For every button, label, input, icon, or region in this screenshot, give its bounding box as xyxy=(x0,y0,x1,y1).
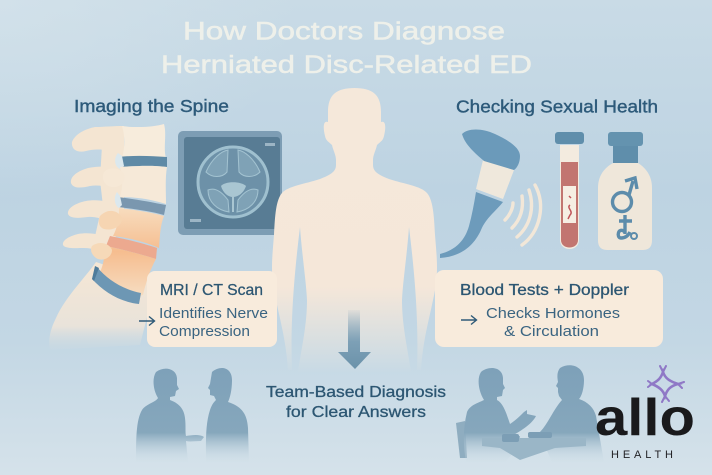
arrow: down xyxy=(338,310,371,369)
arrow xyxy=(461,316,476,324)
icon: body silhouette xyxy=(272,88,437,372)
icon: ultrasound probe xyxy=(440,130,520,258)
arrow xyxy=(139,316,154,326)
icon: purple star xyxy=(648,366,684,402)
vertebra 3 xyxy=(113,208,164,248)
disc 4 xyxy=(92,267,141,304)
icon: doppler waves xyxy=(505,185,541,245)
panel: MRI / CT scan xyxy=(139,271,277,347)
text: team-based diagnosis: Team-Based Diagnosis xyxy=(266,384,446,401)
icon: consultation at table xyxy=(456,365,604,462)
logo: allo health xyxy=(595,366,695,461)
hands xyxy=(502,434,519,442)
vertebra 4 xyxy=(100,246,156,298)
title: How Doctors Diagnose xyxy=(183,18,505,46)
logo: allo health: allo xyxy=(595,389,695,447)
panel: blood tests + doppler: & Circulation xyxy=(504,323,599,340)
text: team-based diagnosis xyxy=(266,384,446,421)
spinous processes xyxy=(63,126,124,256)
text: team-based diagnosis: for Clear Answers xyxy=(286,404,426,421)
disc 2 xyxy=(117,197,166,215)
vertebra 1 xyxy=(122,124,166,158)
icon: blood test tube xyxy=(555,132,584,249)
title xyxy=(161,18,532,79)
vertebra 2 xyxy=(120,166,167,204)
heading: imaging the spine: Imaging the Spine xyxy=(74,96,229,116)
heading: checking sexual health: Checking Sexual Health xyxy=(456,96,658,116)
panel: MRI / CT scan: Identifies Nerve xyxy=(159,305,268,322)
panel: blood tests + doppler xyxy=(435,270,663,347)
logo: allo health: HEALTH xyxy=(611,449,673,461)
joint 1 xyxy=(103,168,124,187)
icon: MRI scan monitor xyxy=(178,131,282,235)
disc 1 xyxy=(118,156,167,167)
icon: two doctors talking xyxy=(136,368,249,462)
icon: hormone bottle xyxy=(598,132,652,250)
icon: spine illustration xyxy=(49,124,167,350)
disc 3 xyxy=(106,236,157,259)
sacrum xyxy=(49,262,150,350)
table xyxy=(482,438,586,460)
title: Herniated Disc-Related ED xyxy=(161,51,532,79)
panel: blood tests + doppler: Blood Tests + Doppler xyxy=(460,282,630,299)
panel: MRI / CT scan: Compression xyxy=(159,323,250,340)
chair xyxy=(456,421,467,458)
panel: MRI / CT scan: MRI / CT Scan xyxy=(160,282,263,299)
panel: blood tests + doppler: Checks Hormones xyxy=(486,305,620,322)
